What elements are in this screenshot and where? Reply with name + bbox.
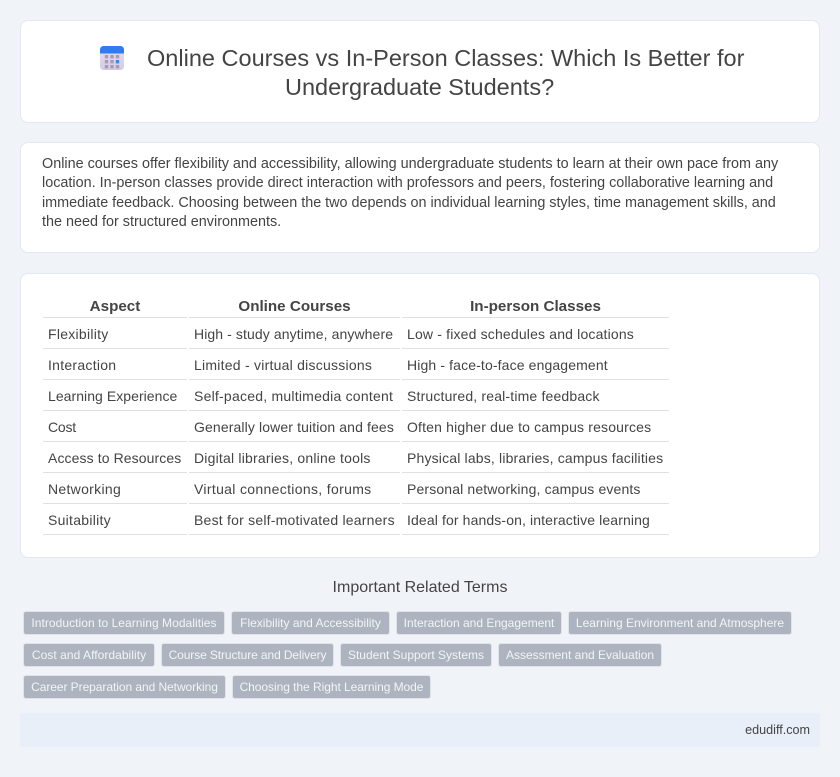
tag (396, 611, 562, 635)
panel: introduction (20, 142, 820, 253)
row: Flexibility: Low - fixed schedules and locations (407, 326, 634, 342)
text block: introduction: the need for structured environments. (42, 214, 281, 230)
tag (23, 611, 225, 635)
row: Interaction: Limited - virtual discussions (194, 357, 372, 373)
comparison table (43, 298, 669, 535)
title (147, 45, 744, 100)
row: Networking: Virtual connections, forums (194, 481, 372, 497)
tag (23, 675, 226, 699)
tag list: related terms (23, 611, 792, 699)
panel: comparison table (20, 273, 820, 558)
row: Flexibility: Flexibility (48, 326, 109, 342)
row: Suitability: Suitability (48, 512, 111, 528)
row: Access to Resources: Physical labs, libraries, campus facilities (407, 450, 663, 466)
row: Flexibility: High - study anytime, anywhere (194, 326, 393, 342)
tag: Learning Environment and Atmosphere (576, 616, 784, 630)
row: Cost: Often higher due to campus resources (407, 419, 651, 435)
row: Learning Experience (43, 388, 669, 411)
row: Access to Resources (43, 450, 669, 473)
table header: Aspect (90, 298, 140, 315)
row: Cost: Cost (48, 419, 76, 435)
text block: introduction (42, 156, 778, 230)
row: Networking (43, 481, 669, 504)
tag (340, 643, 492, 667)
footer bar (20, 713, 820, 747)
table header (43, 298, 669, 318)
row: Interaction: Interaction (48, 357, 116, 373)
text block: introduction: immediate feedback. Choosing between the two depends on individual learning styles, time management skills, and (42, 195, 776, 211)
tag: Cost and Affordability (32, 648, 146, 662)
row: Flexibility (43, 326, 669, 349)
row: Access to Resources: Access to Resources (48, 450, 181, 466)
row: Learning Experience: Self-paced, multimedia content (194, 388, 393, 404)
row: Suitability: Ideal for hands-on, interactive learning (407, 512, 650, 528)
tag (231, 611, 390, 635)
row: Interaction: High - face-to-face engagement (407, 357, 608, 373)
row: Interaction (43, 357, 669, 380)
tag: Interaction and Engagement (404, 616, 554, 630)
tag: Assessment and Evaluation (506, 648, 654, 662)
tag (232, 675, 431, 699)
row: Cost (43, 419, 669, 442)
tag: Introduction to Learning Modalities (31, 616, 217, 630)
text block: introduction: Online courses offer flexibility and accessibility, allowing undergraduate students to learn at their own pace from any (42, 156, 778, 172)
row: Cost: Generally lower tuition and fees (194, 419, 394, 435)
row: Suitability: Best for self-motivated learners (194, 512, 395, 528)
row: Networking: Networking (48, 481, 121, 497)
tag (498, 643, 662, 667)
tag: Course Structure and Delivery (169, 648, 326, 662)
row: Suitability (43, 512, 669, 535)
tag: Career Preparation and Networking (31, 680, 218, 694)
tag: Flexibility and Accessibility (240, 616, 381, 630)
row: Access to Resources: Digital libraries, online tools (194, 450, 371, 466)
row: Networking: Personal networking, campus events (407, 481, 641, 497)
table header: Online Courses (238, 298, 351, 315)
row: Learning Experience: Learning Experience (48, 388, 177, 404)
tag: Student Support Systems (348, 648, 484, 662)
title: Online Courses vs In-Person Classes: Which Is Better for (147, 45, 744, 71)
icon: calendar (100, 46, 124, 70)
heading: related terms: Important Related Terms (333, 579, 507, 596)
table header: In-person Classes (470, 298, 601, 315)
tag (23, 643, 155, 667)
title: Undergraduate Students? (285, 74, 554, 100)
footer credit: edudiff.com (745, 723, 810, 737)
text block: introduction: location. In-person classes provide direct interaction with professors and peers, fostering collaborative learning and (42, 175, 773, 191)
panel: header (20, 20, 820, 123)
tag: Choosing the Right Learning Mode (240, 680, 423, 694)
row: Learning Experience: Structured, real-time feedback (407, 388, 600, 404)
tag (161, 643, 334, 667)
tag (568, 611, 792, 635)
